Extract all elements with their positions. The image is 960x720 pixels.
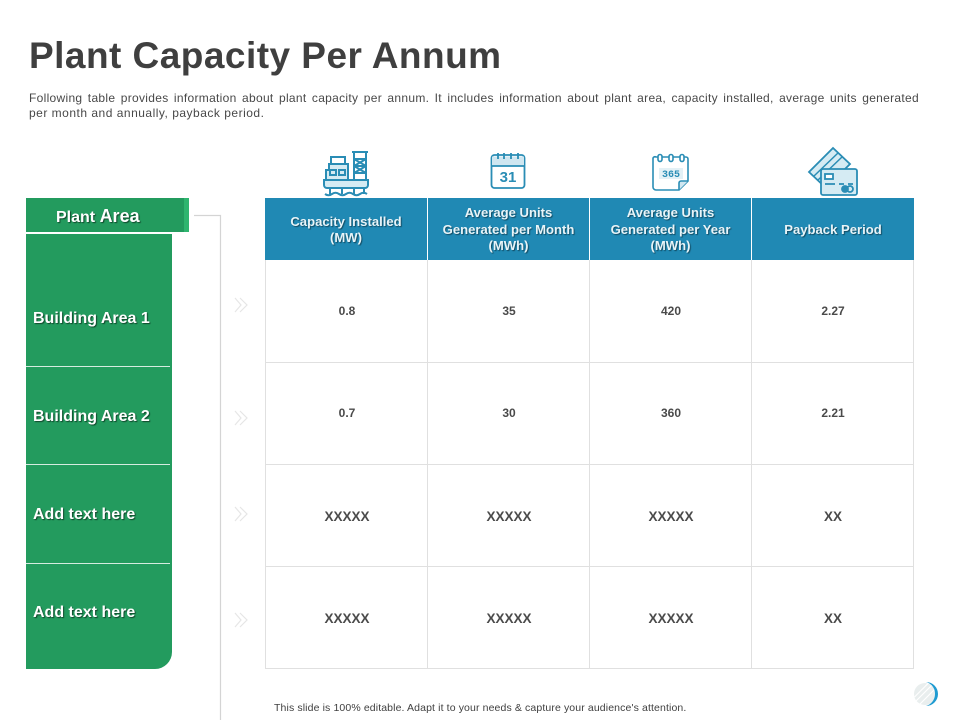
cell values row 4: XXXXX (486, 611, 532, 626)
header: units per month (428, 198, 589, 260)
label: add text 1: Add text here (33, 506, 135, 523)
label: building area 2: Building Area 2 (33, 408, 150, 425)
header: units per month: Average Units (465, 205, 552, 220)
intro text (29, 91, 919, 120)
cell values row 2: 30 (502, 406, 516, 420)
cell values row 3: XXXXX (486, 509, 532, 524)
cell values row 1: 420 (661, 304, 681, 318)
cell values row 3: XX (824, 509, 842, 524)
intro text: per month and annually, payback period. (29, 106, 264, 120)
cell values row 2 (339, 406, 845, 420)
arrow: row 3 (234, 506, 248, 522)
cell values row 1: 2.27 (821, 304, 845, 318)
header: capacity installed: Capacity Installed (290, 214, 402, 228)
cell values row 3: XXXXX (324, 509, 370, 524)
header: units per year: (MWh) (650, 238, 690, 253)
intro text: Following table provides information about plant capacity per annum. It includes information about plant area, capacity installed, average units generated (29, 91, 919, 105)
icon: calendar 365 (652, 154, 689, 191)
cell values row 3 (324, 509, 842, 524)
header: capacity installed (265, 198, 427, 260)
header: units per year: Average Units (627, 205, 714, 220)
footer note: This slide is 100% editable. Adapt it to your needs & capture your audience's attention. (274, 702, 686, 714)
panel: building list (26, 234, 172, 669)
cell values row 3: XXXXX (648, 509, 694, 524)
cell values row 4: XXXXX (648, 611, 694, 626)
cell values row 4: XX (824, 611, 842, 626)
header: units per year (590, 198, 751, 260)
header: units per year: Generated per Year (611, 222, 730, 237)
row divider (26, 366, 170, 367)
cell values row 1 (339, 304, 845, 318)
title: Plant Capacity Per Annum (29, 35, 502, 76)
header: payback period (752, 198, 914, 260)
cell values row 2: 360 (661, 406, 681, 420)
cell values row 2: 0.7 (339, 406, 355, 420)
arrow: row 1 (234, 298, 248, 312)
label: building area 1: Building Area 1 (33, 310, 150, 327)
icon: logo (914, 682, 938, 706)
cell values row 1: 35 (502, 304, 516, 318)
header label: Plant Area (56, 206, 140, 226)
header: payback period: Payback Period (784, 222, 882, 237)
icon: calendar 365: 365 (662, 170, 680, 181)
data table (265, 198, 914, 669)
header: units per month: (MWh) (488, 238, 528, 253)
arrow: row 2 (234, 410, 248, 426)
icon: calendar 31 (490, 153, 526, 189)
icon: calendar 31: 31 (500, 169, 516, 186)
header accent strip (184, 198, 189, 232)
arrow: row 4 (234, 612, 248, 628)
row divider (26, 464, 170, 465)
icon: credit cards (808, 146, 858, 196)
cell values row 4: XXXXX (324, 611, 370, 626)
icon: offshore plant (323, 151, 369, 196)
row divider (26, 563, 170, 564)
header: capacity installed: (MW) (330, 230, 362, 245)
cell values row 2: 2.21 (821, 406, 845, 420)
label: add text 2: Add text here (33, 604, 135, 621)
panel: plant area header (26, 198, 189, 232)
header: units per month: Generated per Month (443, 222, 574, 237)
cell values row 1: 0.8 (339, 304, 355, 318)
connector line (194, 214, 221, 720)
cell values row 4 (324, 611, 842, 626)
